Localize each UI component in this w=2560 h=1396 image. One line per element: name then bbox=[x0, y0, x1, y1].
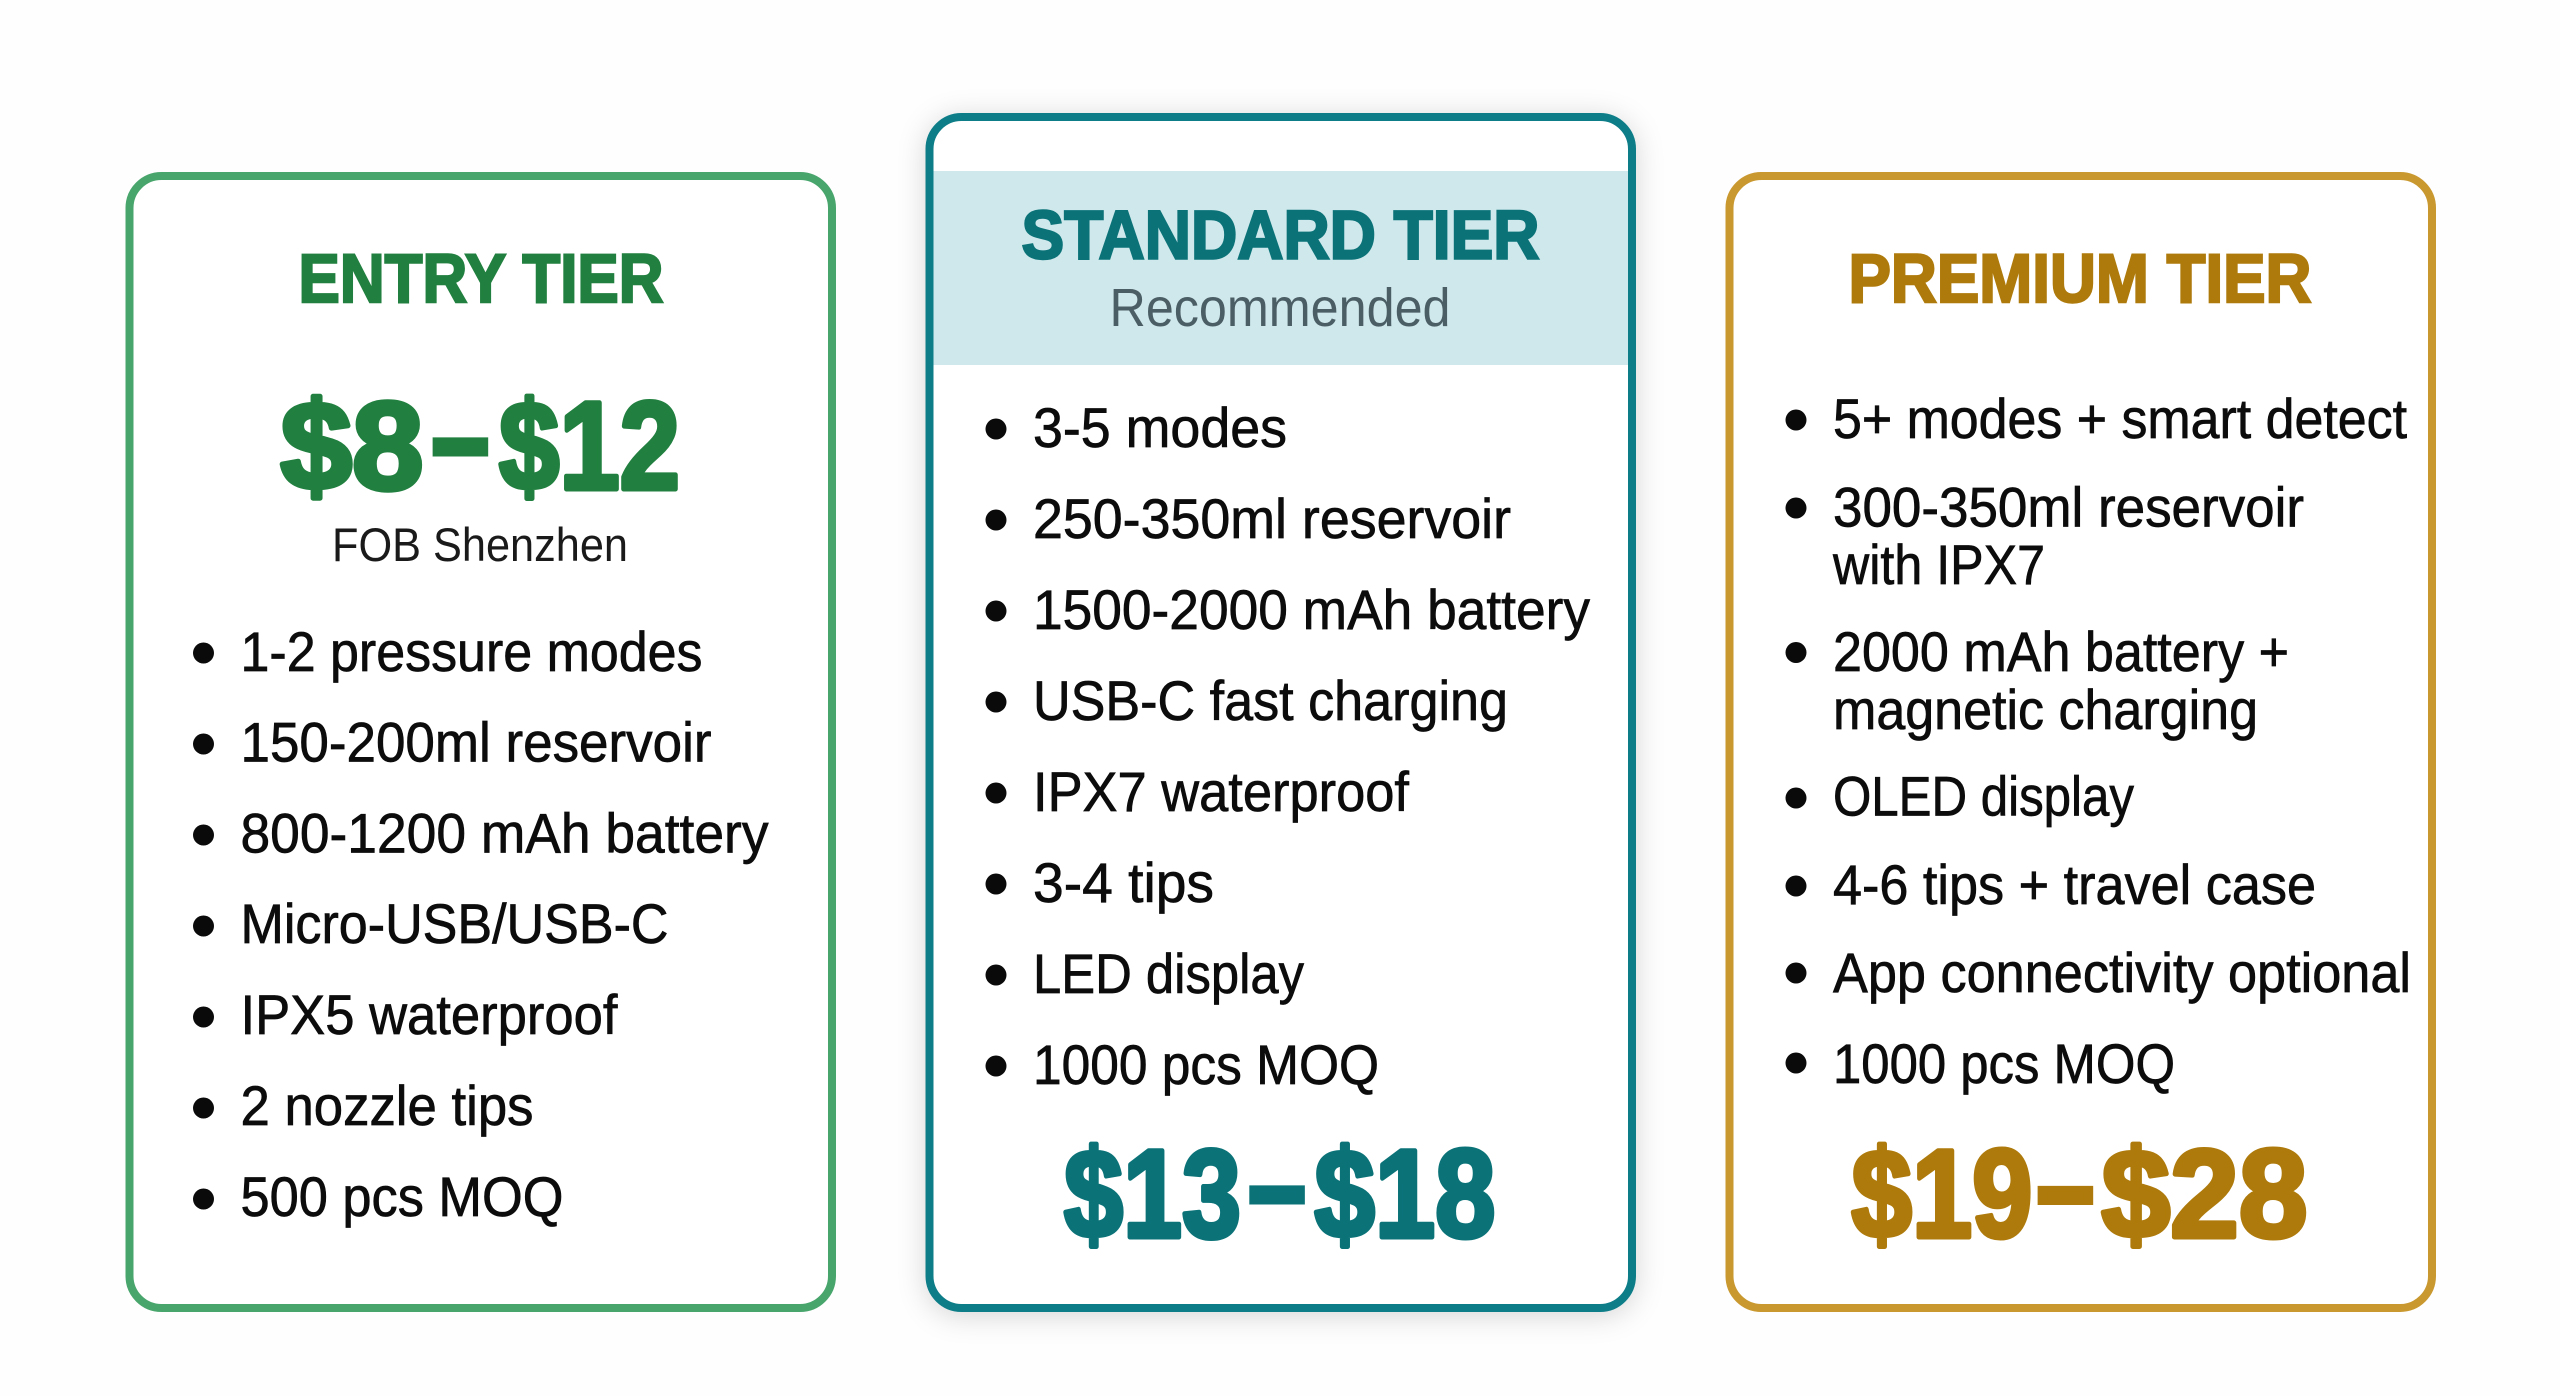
price: entry bbox=[280, 376, 680, 516]
price: entry: $12 bbox=[499, 377, 680, 516]
feature list: entry: 150-200ml reservoir bbox=[240, 710, 712, 774]
feature list: standard: 250-350ml reservoir bbox=[1033, 487, 1511, 550]
panel: standard tier bbox=[930, 117, 1632, 1308]
heading: entry tier: ENTRY TIER bbox=[298, 240, 664, 317]
feature list: entry bbox=[193, 620, 768, 1228]
heading: premium tier: PREMIUM TIER bbox=[1848, 240, 2312, 317]
feature list: premium: 2000 mAh battery + bbox=[1833, 620, 2289, 683]
feature list: premium: with IPX7 bbox=[1832, 533, 2045, 596]
feature list: standard: 3-4 tips bbox=[1033, 851, 1214, 914]
feature list: standard bbox=[986, 396, 1590, 1096]
price: standard: - bbox=[1247, 1124, 1307, 1248]
card frame: premium bbox=[1730, 176, 2432, 1308]
panel: entry tier bbox=[130, 176, 832, 1308]
feature list: premium: 300-350ml reservoir bbox=[1833, 476, 2304, 538]
feature list: standard: LED display bbox=[1033, 942, 1304, 1005]
card frame: entry bbox=[130, 176, 832, 1308]
price: entry: $8 bbox=[280, 377, 424, 516]
price: premium: $28 bbox=[2102, 1125, 2308, 1264]
price: premium: $19 bbox=[1852, 1125, 2032, 1264]
feature list: premium: App connectivity optional bbox=[1833, 941, 2411, 1004]
feature list: standard: 1500-2000 mAh battery bbox=[1033, 578, 1590, 641]
price: entry: - bbox=[430, 376, 490, 500]
feature list: standard: 1000 pcs MOQ bbox=[1033, 1033, 1379, 1096]
feature list: entry: IPX5 waterproof bbox=[240, 983, 618, 1046]
feature list: premium: OLED display bbox=[1833, 764, 2134, 828]
feature list: entry: Micro-USB/USB-C bbox=[240, 892, 668, 955]
feature list: premium bbox=[1786, 387, 2411, 1095]
feature list: premium: 5+ modes + smart detect bbox=[1833, 387, 2407, 450]
feature list: entry: 500 pcs MOQ bbox=[240, 1165, 564, 1228]
card frame: standard bbox=[930, 117, 1632, 1308]
price: premium: - bbox=[2036, 1125, 2096, 1248]
price: standard: $13 bbox=[1064, 1125, 1241, 1264]
heading: standard tier: STANDARD TIER bbox=[1022, 196, 1540, 274]
feature list: entry: 1-2 pressure modes bbox=[240, 620, 702, 683]
subheading: recommended: Recommended bbox=[1110, 278, 1450, 338]
price: premium bbox=[1852, 1125, 2308, 1264]
feature list: premium: 4-6 tips + travel case bbox=[1833, 853, 2316, 916]
feature list: entry: 2 nozzle tips bbox=[240, 1074, 534, 1137]
feature list: standard: IPX7 waterproof bbox=[1033, 760, 1409, 823]
header band: standard bbox=[934, 171, 1628, 365]
panel: premium tier bbox=[1730, 176, 2432, 1308]
price: standard: $18 bbox=[1314, 1125, 1496, 1264]
feature list: standard: USB-C fast charging bbox=[1033, 669, 1508, 732]
feature list: entry: 800-1200 mAh battery bbox=[240, 802, 768, 864]
note: FOB Shenzhen: FOB Shenzhen bbox=[332, 518, 628, 571]
price: standard bbox=[1064, 1124, 1496, 1264]
feature list: standard: 3-5 modes bbox=[1033, 396, 1287, 459]
feature list: premium: 1000 pcs MOQ bbox=[1833, 1032, 2175, 1095]
feature list: premium: magnetic charging bbox=[1833, 678, 2258, 741]
